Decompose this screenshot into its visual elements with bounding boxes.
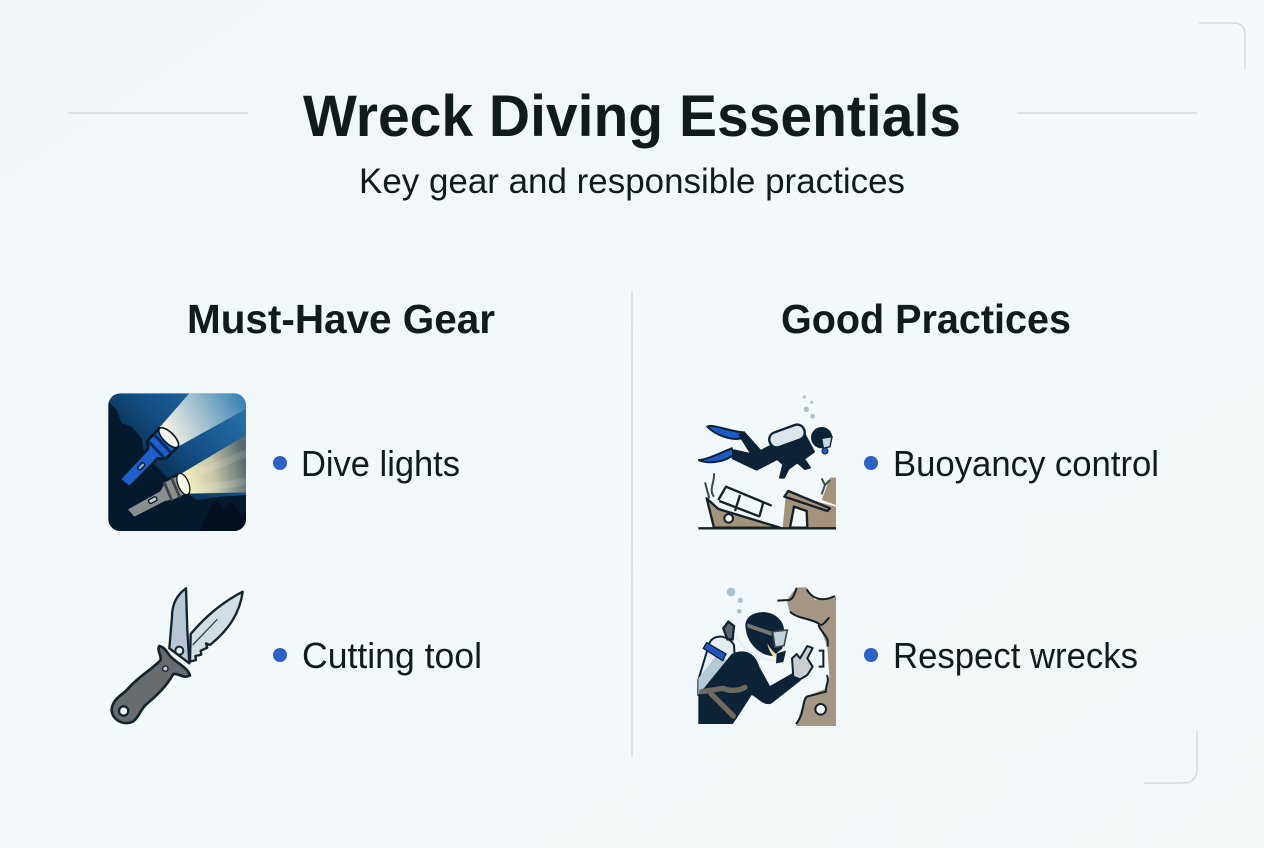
bullet: dive lights [273, 456, 287, 470]
heading: must-have gear: Must-Have Gear [187, 296, 495, 342]
subtitle: Key gear and responsible practices [359, 162, 905, 201]
label: cutting tool: Cutting tool [302, 635, 482, 676]
bullet: respect wrecks [864, 648, 878, 662]
panel: good practices [698, 296, 1159, 726]
grey flashlight [128, 472, 190, 516]
label: dive lights: Dive lights [301, 443, 460, 484]
bullet: cutting tool [273, 648, 287, 662]
heading: good practices: Good Practices [781, 296, 1071, 342]
label: respect wrecks: Respect wrecks [893, 635, 1138, 676]
icon: dive lights [108, 393, 246, 531]
blue flashlight [121, 426, 180, 486]
label: buoyancy control: Buoyancy control [893, 443, 1159, 484]
panel: must-have gear [108, 296, 495, 723]
icon: cutting tool [112, 588, 243, 723]
title: Wreck Diving Essentials [303, 84, 961, 149]
icon: diver respecting wreck [698, 587, 836, 726]
bullet: buoyancy control [864, 456, 878, 470]
icon: diver above wreck [698, 395, 836, 528]
